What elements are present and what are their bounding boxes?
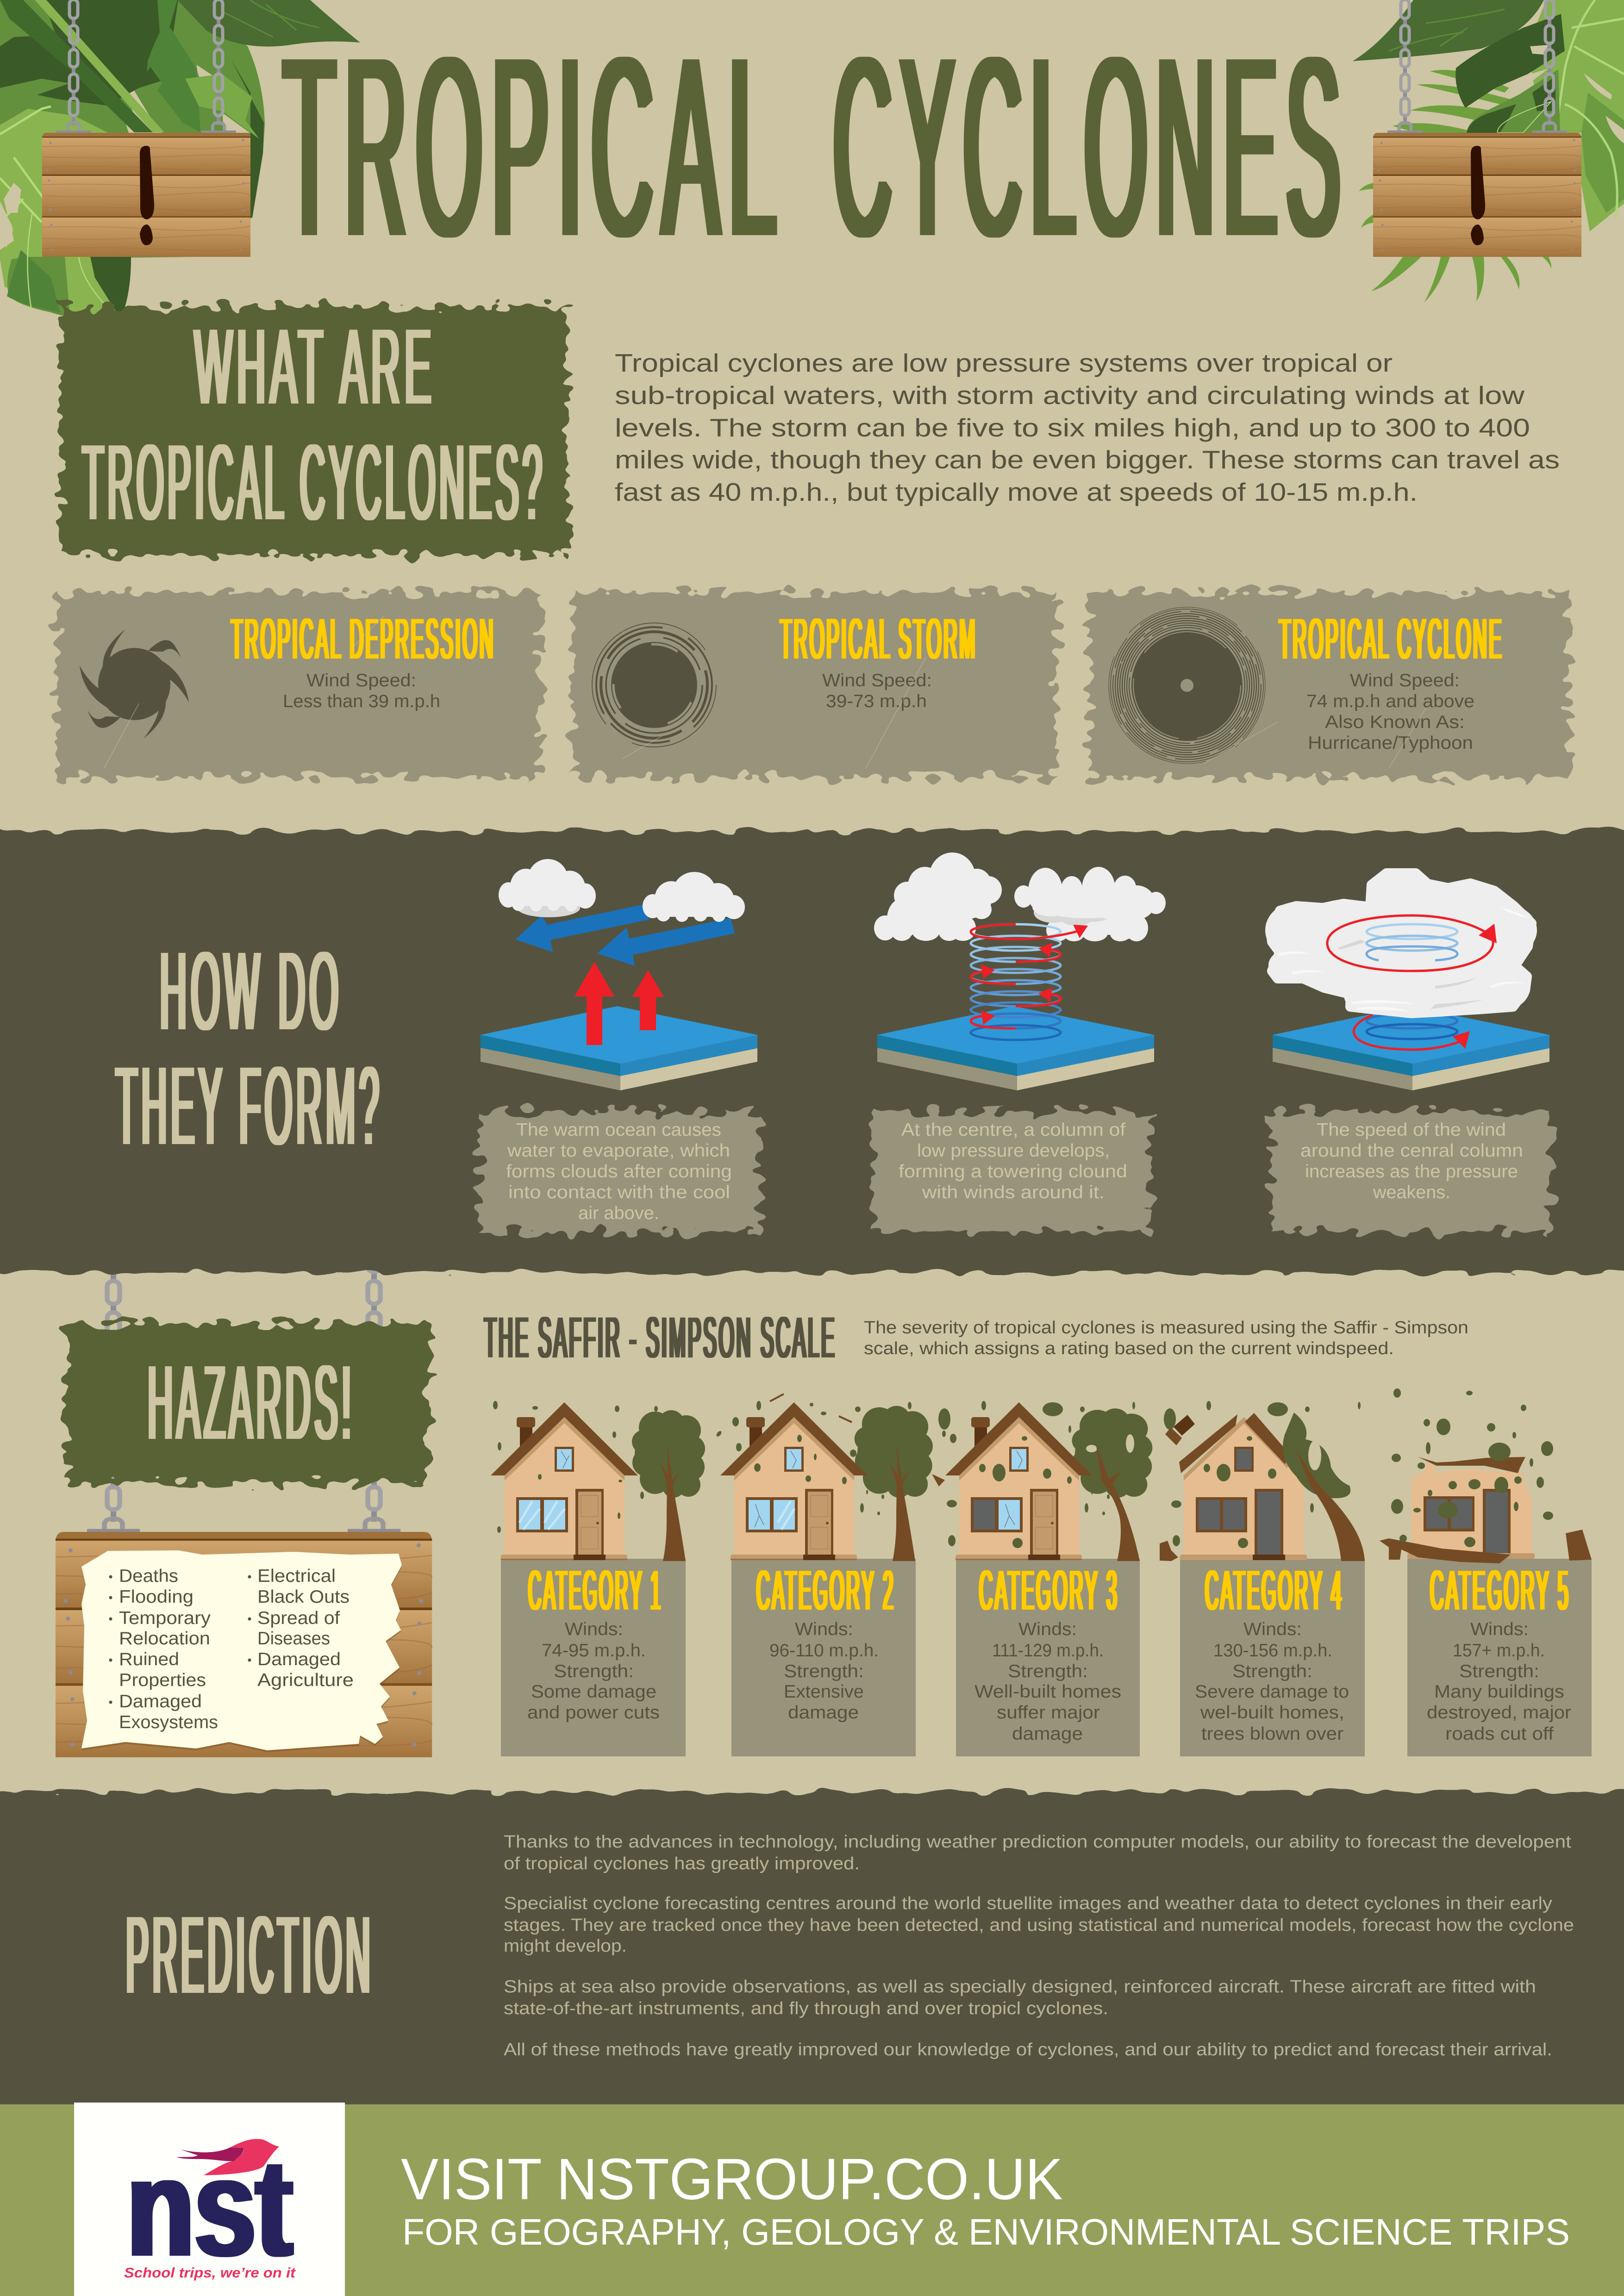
category 4 details: Severe damage to [1195, 1682, 1349, 1702]
icon: cool air blue arrows [515, 904, 735, 966]
flying leaves [938, 1401, 1135, 1548]
band: how do they form [0, 831, 1624, 1273]
hazards list: column 1: Deaths [119, 1566, 178, 1586]
intro paragraph: Tropical cyclones are low pressure systems over tropical or [615, 348, 1393, 377]
hazards chains: upper right [348, 1184, 400, 1359]
category 2 details: Extensive [784, 1682, 864, 1702]
cloud: lower left [874, 892, 976, 941]
hazards list: column 1: Temporary [119, 1608, 211, 1628]
step 2 text: forming a towering clound [899, 1162, 1127, 1182]
category 4 details: trees blown over [1201, 1724, 1343, 1744]
category 3 details: Winds: [1018, 1619, 1077, 1639]
category 4 details: Strength: [1232, 1661, 1312, 1681]
prediction paragraphs: Ships at sea also provide observations, as well as specially designed, reinforced aircraft. These aircraft are fitted with [504, 1977, 1536, 1997]
text: CATEGORY 3 [979, 1559, 1119, 1622]
icon: bird [176, 2139, 279, 2175]
hazards list: column 1: Flooding [119, 1587, 194, 1607]
wind speed text [1306, 671, 1474, 753]
wood warning sign: left [42, 133, 250, 257]
icon: lower coil [1354, 1014, 1463, 1050]
prediction paragraphs: of tropical cyclones has greatly improved. [504, 1854, 860, 1873]
icon: upper coil and arrow [1327, 915, 1497, 971]
step 3 text: weakens. [1373, 1182, 1450, 1202]
category 1 card [491, 1401, 705, 1756]
icon: warm air red arrows [575, 962, 664, 1045]
step 1 text: The warm ocean causes [516, 1120, 721, 1140]
scene 3: wind speed increases [1265, 869, 1549, 1090]
chain: right sign right [1532, 0, 1567, 134]
chain: left sign left [56, 0, 91, 134]
hazards list: column 2: Diseases [257, 1629, 330, 1649]
panel: tropical cyclone [1080, 578, 1568, 793]
category 1 details [527, 1619, 660, 1723]
category 3 details: Strength: [1008, 1661, 1088, 1681]
scale description: The severity of tropical cyclones is measured using the Saffir - Simpson [864, 1318, 1468, 1338]
step 1 text: air above. [578, 1203, 659, 1223]
intro paragraph: fast as 40 m.p.h., but typically move at speeds of 10-15 m.p.h. [615, 478, 1418, 506]
prediction paragraphs: All of these methods have greatly improved our knowledge of cyclones, and our ability to predict and forecast their arrival. [504, 2040, 1552, 2060]
prediction paragraphs: state-of-the-art instruments, and fly through and over tropicl cyclones. [504, 1999, 1108, 2018]
jungle leaves: top left [0, 0, 360, 320]
wind speed text [283, 671, 440, 711]
hazards list: column 1: Damaged [119, 1692, 202, 1711]
category 1 details: Winds: [565, 1619, 623, 1639]
wind speed text [822, 671, 932, 711]
call to action: trips: FOR GEOGRAPHY, GEOLOGY & ENVIRONMENTAL SCIENCE TRIPS [402, 2211, 1570, 2252]
paper note [81, 1550, 402, 1750]
text panel: step 1 [479, 1112, 759, 1232]
hazards chains: lower right [348, 1359, 400, 1533]
panel: what are tropical cyclones [60, 306, 568, 555]
cloud shadow [1034, 902, 1112, 926]
cloud: upper right [1014, 867, 1166, 920]
category 4 card [1160, 1401, 1365, 1756]
hazards chains: lower left [87, 1359, 140, 1533]
category 2 details: 96-110 m.p.h. [769, 1641, 879, 1661]
hazards list: column 1: Ruined [119, 1649, 179, 1669]
wind speed text: 74 m.p.h and above [1306, 691, 1474, 711]
hazards chains: upper left [87, 1184, 140, 1359]
step 1 text: water to evaporate, which [507, 1141, 730, 1161]
category 5 details: Strength: [1459, 1661, 1539, 1681]
step 2 text: with winds around it. [922, 1182, 1105, 1202]
logo wordmark: nst [127, 2129, 293, 2286]
intro paragraph: sub-tropical waters, with storm activity and circulating winds at low [615, 381, 1524, 410]
heading: how do they form [116, 929, 383, 1168]
category 5 details: 157+ m.p.h. [1453, 1641, 1545, 1661]
category 1 details: and power cuts [527, 1703, 660, 1723]
panel: hazards sign [66, 1324, 430, 1483]
scene 1: warm ocean evaporating [481, 859, 757, 1090]
category 5 details: destroyed, major [1427, 1703, 1571, 1723]
chain: left sign right [201, 0, 236, 134]
house: destroyed with fallen tree [1380, 1457, 1592, 1563]
icon: storm swirl [569, 600, 739, 770]
flying leaves [493, 1401, 658, 1533]
category 5 details [1427, 1619, 1571, 1744]
panel: tropical storm [569, 592, 1056, 778]
step 1 text: forms clouds after coming [506, 1162, 732, 1182]
category 5 details: roads cut off [1445, 1724, 1554, 1744]
intro paragraph [615, 348, 1560, 506]
chain: right sign left [1387, 0, 1423, 134]
step 3 text: The speed of the wind [1317, 1120, 1506, 1140]
category 1 details: 74-95 m.p.h. [542, 1641, 646, 1661]
category 4 details: wel-built homes, [1200, 1703, 1344, 1723]
icon: wind coil [971, 924, 1061, 1040]
intro paragraph: levels. The storm can be five to six miles high, and up to 300 to 400 [615, 413, 1530, 442]
text: TROPICAL CYCLONES? [82, 423, 546, 542]
category 2 card [715, 1394, 945, 1756]
prediction paragraphs: Specialist cyclone forecasting centres around the world stuellite images and weather data to detect cyclones in their early [504, 1894, 1552, 1913]
category 2 details [769, 1619, 879, 1723]
category 2 details: Strength: [784, 1661, 864, 1681]
house: damaged roof with bent tree [1160, 1412, 1365, 1561]
icon: lower arrow head [1453, 1031, 1470, 1049]
wind speed text: 39-73 m.p.h [826, 691, 927, 711]
cloud: upper left [894, 852, 1002, 920]
house: broken window with tree [945, 1402, 1152, 1561]
step 2 text: At the centre, a column of [901, 1120, 1125, 1140]
prediction paragraphs: stages. They are tracked once they have been detected, and using statistical and numerical models, forecast how the cyclone [504, 1916, 1574, 1935]
cloud: lower right [1046, 908, 1148, 941]
icon: storm cloud [1265, 869, 1537, 1014]
hazards list: column 2 [248, 1566, 354, 1690]
text panel: step 2 [873, 1112, 1151, 1232]
step 3 text: increases as the pressure [1305, 1162, 1518, 1182]
hazards list: column 1 [109, 1566, 218, 1732]
text: TROPICAL STORM [780, 607, 977, 671]
category 4 details [1195, 1619, 1349, 1744]
category 3 card [938, 1401, 1152, 1756]
jungle leaves: top right [1353, 0, 1624, 303]
logo: nst [74, 2103, 345, 2296]
category 3 details: suffer major [997, 1703, 1100, 1723]
band: prediction [0, 1792, 1624, 2144]
text: CATEGORY 2 [756, 1559, 895, 1622]
wind speed text: Less than 39 m.p.h [283, 691, 440, 711]
intro paragraph: miles wide, though they can be even bigger. These storms can travel as [615, 445, 1560, 474]
logo tagline: School trips, we’re on it [124, 2265, 296, 2281]
category 1 details: Some damage [531, 1682, 656, 1702]
category 4 details: Winds: [1243, 1619, 1302, 1639]
wind speed text: Hurricane/Typhoon [1308, 733, 1473, 753]
scene 2: low pressure column [874, 852, 1166, 1090]
text: HAZARDS! [148, 1344, 355, 1462]
prediction paragraphs: might develop. [504, 1936, 627, 1956]
category 2 details: Winds: [795, 1619, 853, 1639]
call to action: visit: VISIT NSTGROUP.CO.UK [401, 2147, 1063, 2212]
icon: clouds [499, 859, 745, 922]
house: intact with tree [491, 1402, 705, 1561]
prediction paragraphs [504, 1832, 1574, 2060]
hazards list: column 1: Exosystems [119, 1712, 218, 1732]
text: TROPICAL DEPRESSION [231, 607, 495, 671]
icon: red wind arrows [971, 924, 1088, 1028]
hazards list: column 2: Spread of [257, 1608, 340, 1628]
step 3 text [1300, 1120, 1523, 1202]
category 3 details: 111-129 m.p.h. [992, 1641, 1104, 1661]
hazards list: column 1: Properties [119, 1670, 206, 1690]
text: THE SAFFIR - SIMPSON SCALE [484, 1306, 837, 1370]
category 1 details: Strength: [554, 1661, 634, 1681]
scale description: scale, which assigns a rating based on the current windspeed. [864, 1339, 1394, 1358]
wind speed text: Wind Speed: [1350, 671, 1460, 691]
scale description [864, 1318, 1468, 1358]
icon: depression swirl [80, 629, 189, 739]
text: PREDICTION [126, 1894, 374, 2016]
wind speed text: Wind Speed: [306, 671, 416, 691]
category 5 card [1380, 1388, 1592, 1756]
category 4 details: 130-156 m.p.h. [1213, 1641, 1332, 1661]
hazards list: column 2: Damaged [257, 1649, 341, 1669]
category 2 details: damage [788, 1703, 859, 1723]
step 2 text [899, 1120, 1127, 1202]
footer band [0, 2104, 1624, 2296]
flying leaves [1391, 1388, 1553, 1547]
wood warning sign: right [1373, 133, 1581, 257]
step 1 text: into contact with the cool [508, 1182, 730, 1202]
wind speed text: Wind Speed: [822, 671, 932, 691]
flying leaves [1164, 1401, 1361, 1548]
category 5 details: Winds: [1470, 1619, 1529, 1639]
category 3 details [974, 1619, 1121, 1744]
text: CATEGORY 4 [1205, 1559, 1343, 1622]
hazards list: column 2: Electrical [257, 1566, 336, 1586]
text: CATEGORY 1 [528, 1559, 662, 1622]
category 3 details: Well-built homes [974, 1682, 1121, 1702]
wood board: hazards list [56, 1532, 432, 1757]
panel: tropical depression [56, 592, 540, 778]
category 3 details: damage [1012, 1724, 1083, 1744]
prediction paragraphs: Thanks to the advances in technology, including weather prediction computer models, our ability to forecast the developent [504, 1832, 1571, 1852]
text: HOW DO [160, 929, 343, 1053]
wind speed text: Also Known As: [1325, 712, 1465, 732]
step 2 text: low pressure develops, [917, 1141, 1110, 1161]
step 3 text: around the cenral column [1300, 1141, 1523, 1161]
icon: clouds [874, 852, 1166, 941]
hazards list: column 2: Black Outs [257, 1587, 350, 1607]
step 1 text [506, 1120, 732, 1223]
hazards list: column 1: Relocation [119, 1629, 210, 1649]
text: THEY FORM? [116, 1044, 383, 1168]
category 5 details: Many buildings [1434, 1682, 1564, 1702]
heading: what are tropical cyclones [82, 307, 546, 542]
flying leaves [715, 1394, 945, 1515]
house: cracked window with tree [720, 1402, 933, 1561]
hazards list: column 2: Agriculture [257, 1670, 354, 1690]
icon: cyclone swirl [1080, 578, 1294, 793]
text panel: step 3 [1271, 1112, 1551, 1232]
heading: what are tropical cyclones: WHAT ARE [194, 307, 436, 427]
